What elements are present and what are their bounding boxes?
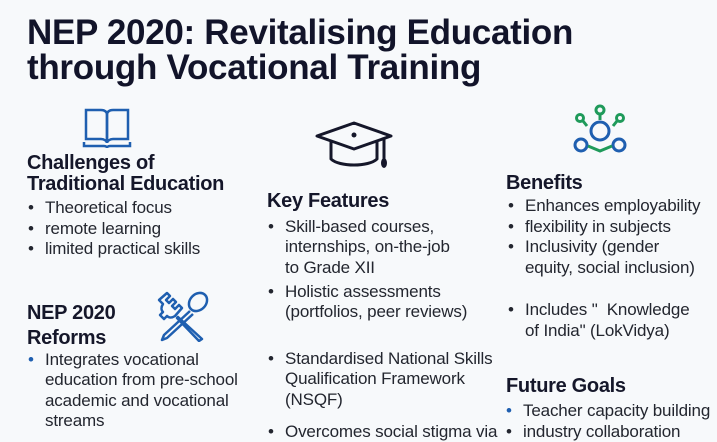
- text: limited practical skills: [45, 239, 200, 258]
- text: Qualification Framework: [285, 369, 465, 388]
- text: Teacher capacity building: [523, 401, 710, 420]
- text: •: [508, 216, 514, 236]
- text: remote learning: [45, 218, 161, 238]
- text: •: [508, 196, 514, 215]
- text: •: [28, 218, 34, 238]
- text: (NSQF): [285, 390, 343, 409]
- text: education from pre-school: [45, 370, 238, 389]
- heading: future goals: Future Goals: [506, 375, 626, 397]
- title: [27, 13, 573, 87]
- text: •: [28, 239, 34, 258]
- heading: benefits: Benefits: [506, 172, 583, 194]
- list: reforms: [28, 350, 238, 430]
- icon: fork and spoon: [158, 292, 208, 342]
- text: •: [268, 422, 274, 441]
- heading: challenges: [27, 152, 224, 195]
- heading: reforms: NEP 2020: [27, 302, 115, 324]
- icon: graduation cap: [316, 122, 392, 168]
- text: Inclusivity (gender: [525, 237, 659, 256]
- text: •: [268, 217, 274, 236]
- heading: challenges: Challenges of: [27, 152, 154, 174]
- heading: reforms: Reforms: [27, 327, 106, 349]
- title: through Vocational Training: [27, 48, 481, 87]
- text: Theoretical focus: [45, 198, 172, 217]
- text: Enhances employability: [525, 196, 700, 215]
- list: key features: [268, 217, 498, 441]
- text: to Grade XII: [285, 258, 375, 277]
- text: internships, on-the-job: [285, 237, 450, 256]
- text: flexibility in subjects: [525, 216, 671, 236]
- text: of India" (LokVidya): [525, 320, 669, 340]
- text: Standardised National Skills: [285, 349, 492, 368]
- heading: key features: Key Features: [267, 190, 389, 212]
- text: •: [508, 237, 514, 256]
- text: •: [268, 349, 274, 368]
- text: •: [506, 401, 512, 420]
- text: streams: [45, 411, 104, 430]
- text: Integrates vocational: [45, 350, 199, 369]
- text: industry collaboration: [523, 422, 680, 441]
- text: •: [508, 300, 514, 319]
- icon: network: [574, 104, 626, 153]
- heading: challenges: Traditional Education: [27, 173, 224, 195]
- text: academic and vocational: [45, 391, 229, 410]
- list: future goals: [506, 401, 710, 441]
- heading: reforms: [27, 302, 115, 349]
- list: challenges: [28, 198, 200, 258]
- text: •: [506, 422, 512, 441]
- title: NEP 2020: Revitalising Education: [27, 13, 573, 52]
- text: •: [28, 198, 34, 217]
- text: Skill-based courses,: [285, 217, 434, 236]
- text: (portfolios, peer reviews): [285, 302, 467, 321]
- list: benefits: [508, 196, 700, 340]
- text: equity, social inclusion): [525, 258, 695, 276]
- text: •: [28, 350, 34, 369]
- text: Includes " Knowledge: [525, 300, 690, 319]
- text: Holistic assessments: [285, 282, 441, 301]
- icon: open book: [82, 108, 132, 148]
- text: Overcomes social stigma via: [285, 422, 497, 441]
- text: •: [268, 282, 274, 301]
